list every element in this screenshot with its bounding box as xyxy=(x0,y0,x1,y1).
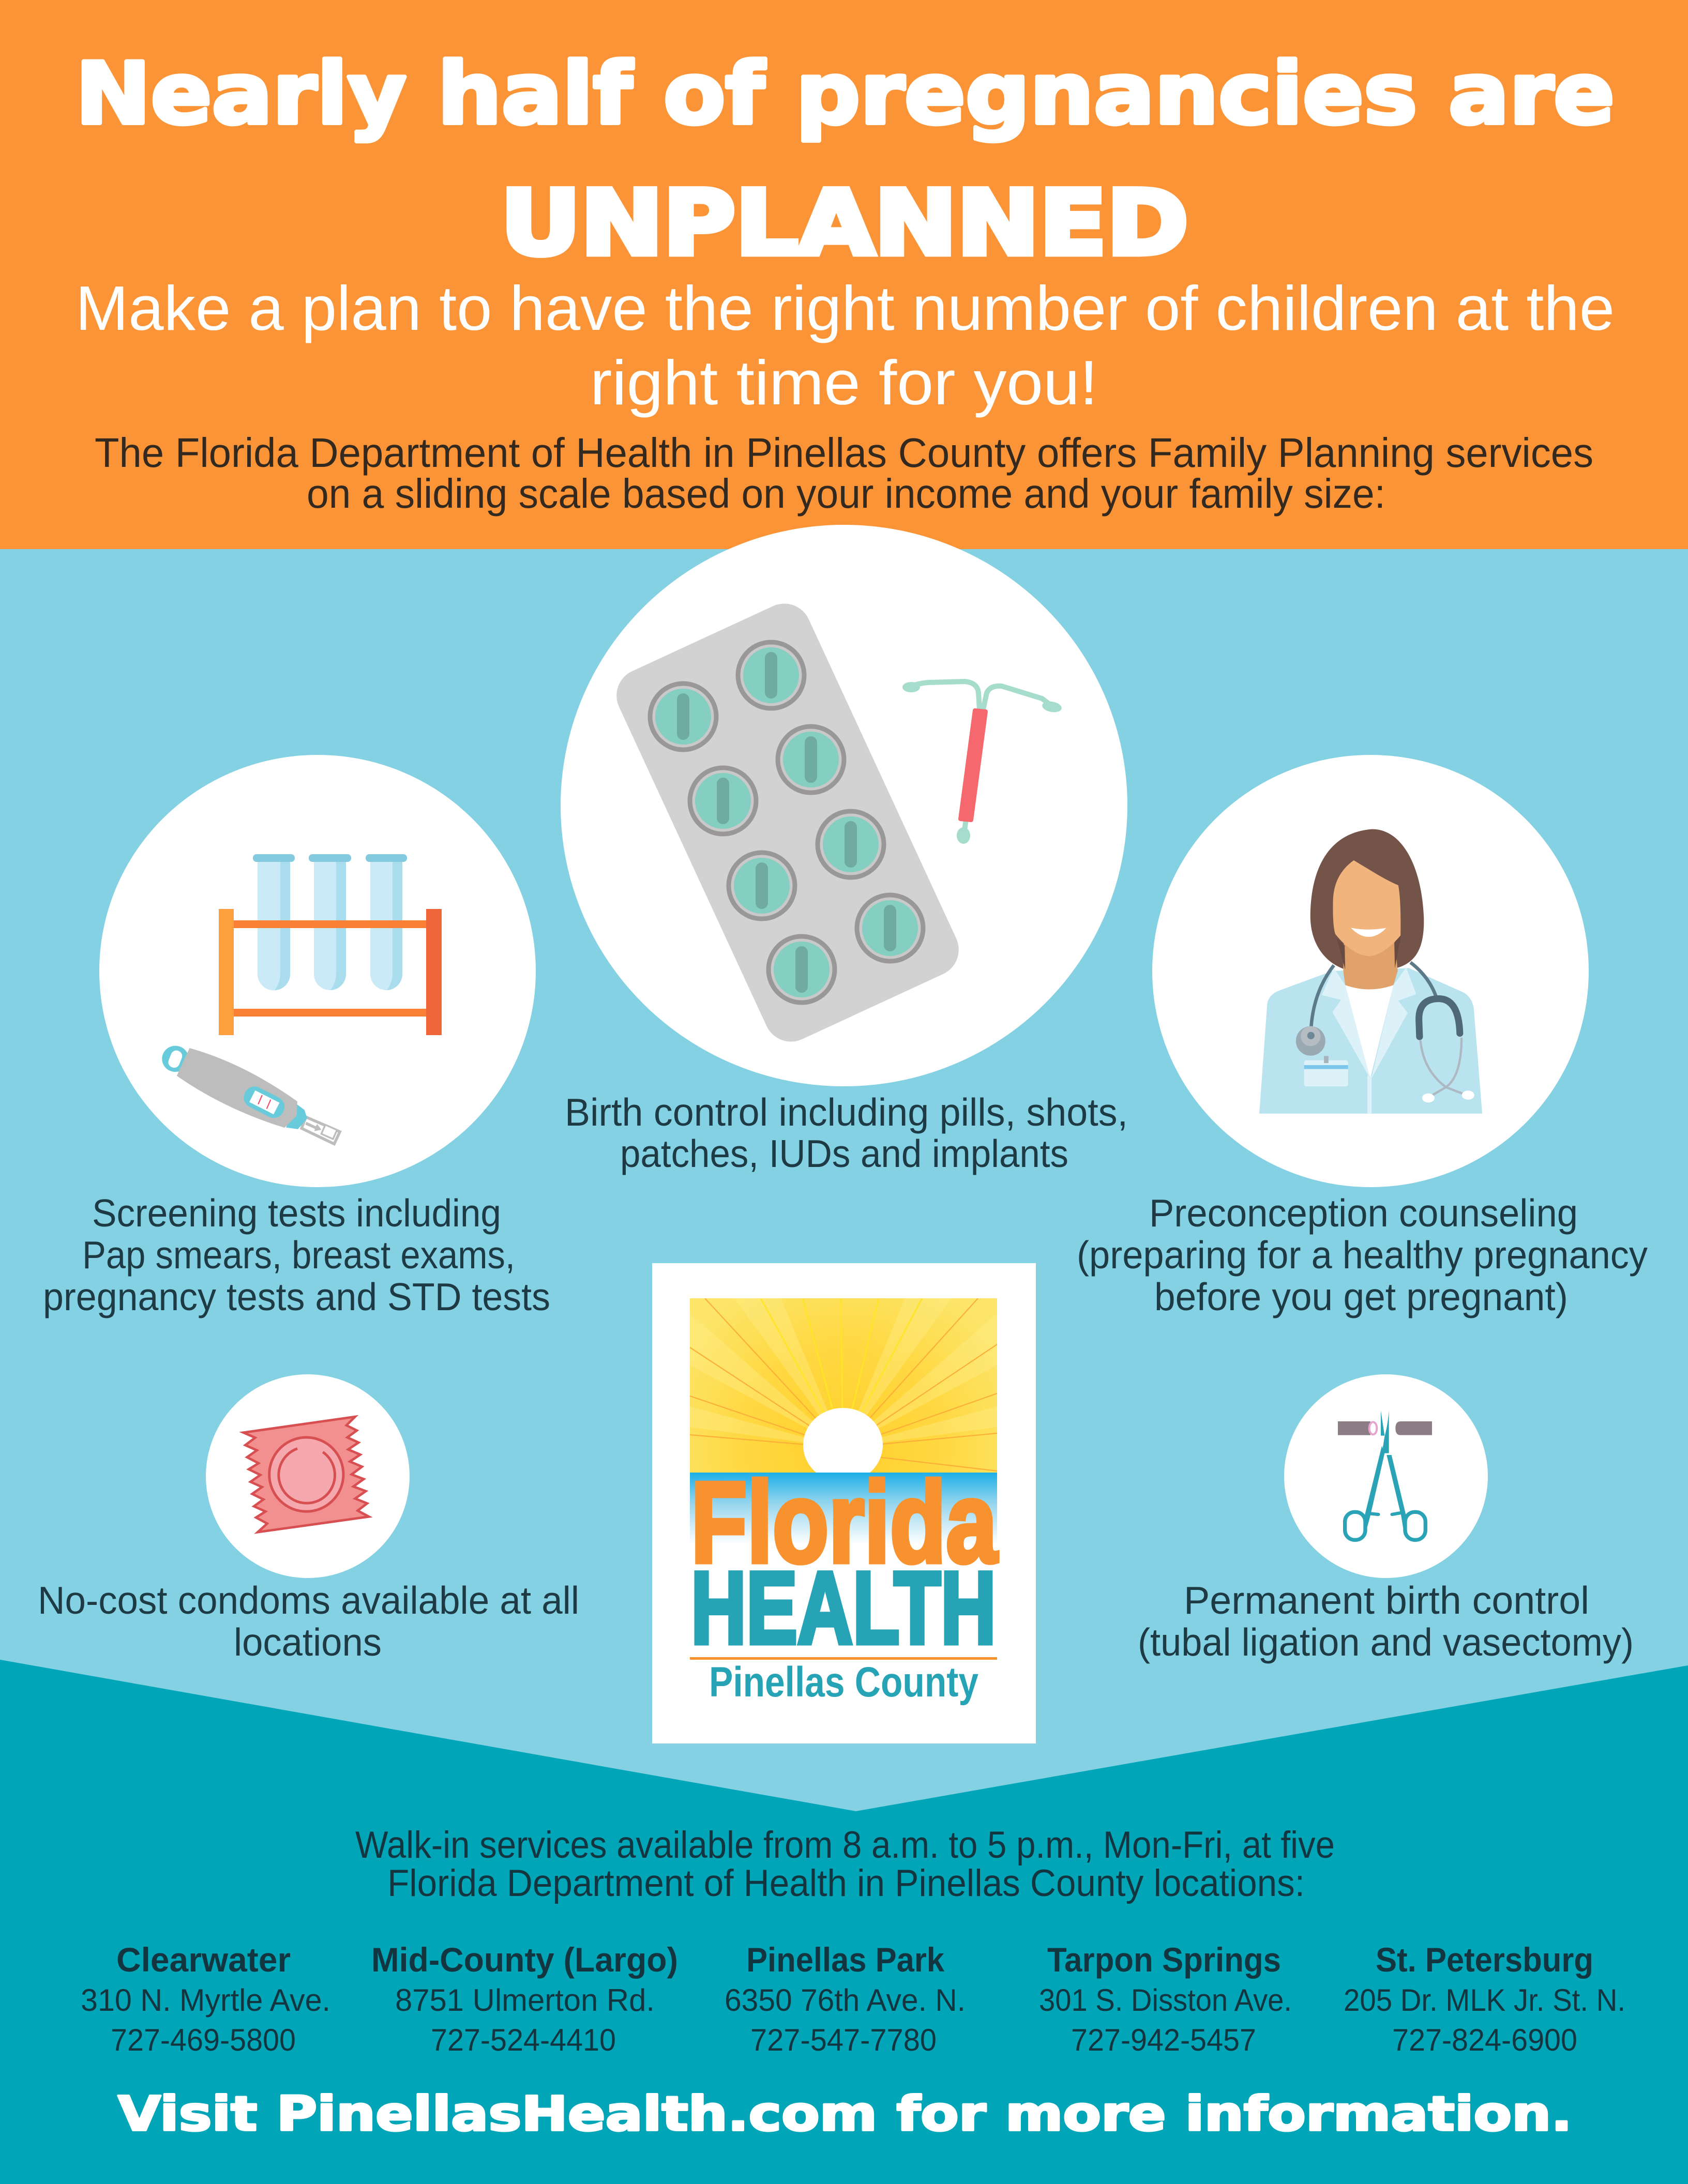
location: Tarpon Springs: 727-942-5457 xyxy=(1071,2023,1256,2057)
location: Mid-County (Largo) xyxy=(371,1940,678,2057)
icon: test tube rack xyxy=(219,854,442,1035)
location: Pinellas Park xyxy=(725,1940,966,2057)
location: St. Petersburg: 727-824-6900 xyxy=(1392,2023,1577,2057)
icon: doctor xyxy=(1152,755,1589,1187)
icon: blister pack xyxy=(608,595,968,1051)
subtitle xyxy=(76,273,1615,418)
logo: Florida Health Pinellas County xyxy=(652,1263,1036,1743)
text: preconception counseling: (preparing for a healthy pregnancy xyxy=(1077,1233,1648,1277)
location: Clearwater: Clearwater xyxy=(116,1940,291,1979)
title xyxy=(76,44,1615,275)
text: walk-in services: Walk-in services available from 8 a.m. to 5 p.m., Mon-Fri, at five xyxy=(355,1824,1335,1866)
location: Clearwater: 727-469-5800 xyxy=(111,2023,296,2057)
text: condoms xyxy=(38,1579,579,1664)
text: birth control xyxy=(565,1090,1128,1175)
intro text: on a sliding scale based on your income and your family size: xyxy=(307,471,1385,517)
doctor coat xyxy=(1259,968,1482,1114)
call to action: Visit PinellasHealth.com for more information. xyxy=(118,2086,1572,2142)
panel: footer band xyxy=(0,1660,1688,2184)
subtitle: right time for you! xyxy=(590,347,1098,418)
text: screening tests xyxy=(43,1191,550,1318)
panel: background services area xyxy=(0,548,1688,2184)
text: screening tests: Screening tests including xyxy=(92,1191,501,1235)
text: birth control: Birth control including pills, shots, xyxy=(565,1090,1128,1134)
doctor shirt xyxy=(1345,985,1393,1079)
text: preconception counseling: Preconception counseling xyxy=(1149,1191,1578,1235)
logo water gradient xyxy=(690,1473,997,1544)
icon: surgical scissors xyxy=(1284,1374,1488,1578)
location: Clearwater: 310 N. Myrtle Ave. xyxy=(81,1983,330,2018)
stethoscope xyxy=(1296,962,1474,1102)
logo sun and rays xyxy=(690,1298,997,1482)
icon: pregnancy test xyxy=(162,1046,340,1144)
location: Mid-County (Largo): 727-524-4410 xyxy=(431,2023,616,2057)
text: screening tests: Pap smears, breast exams, xyxy=(82,1233,515,1277)
location: Mid-County (Largo): Mid-County (Largo) xyxy=(371,1940,678,1979)
location: St. Petersburg xyxy=(1344,1940,1625,2057)
title line 1: Nearly half of pregnancies are xyxy=(76,44,1615,143)
text: preconception counseling: before you get pregnant) xyxy=(1154,1275,1568,1318)
text: permanent birth control xyxy=(1138,1579,1634,1664)
location: Tarpon Springs xyxy=(1039,1940,1292,2057)
text: walk-in services: Florida Department of Health in Pinellas County locations: xyxy=(387,1862,1305,1904)
logo word Florida: Florida xyxy=(691,1459,998,1587)
logo word HEALTH: HEALTH xyxy=(691,1551,996,1665)
text: condoms: locations xyxy=(234,1620,382,1664)
text: birth control: patches, IUDs and implants xyxy=(620,1132,1068,1175)
icon: test tubes and pregnancy test xyxy=(99,755,536,1187)
location: Tarpon Springs: Tarpon Springs xyxy=(1047,1940,1281,1979)
subtitle: Make a plan to have the right number of children at the xyxy=(76,273,1615,343)
text: permanent birth control: Permanent birth control xyxy=(1184,1579,1589,1622)
intro text: The Florida Department of Health in Pinellas County offers Family Planning services xyxy=(95,430,1593,476)
icon: condom xyxy=(206,1374,410,1578)
logo word Pinellas County: Pinellas County xyxy=(709,1659,978,1706)
text: screening tests: pregnancy tests and STD tests xyxy=(43,1275,550,1318)
location: Pinellas Park: Pinellas Park xyxy=(746,1940,944,1979)
text: preconception counseling xyxy=(1077,1191,1648,1318)
doctor hair xyxy=(1310,829,1424,969)
location: Clearwater xyxy=(81,1940,330,2057)
intro text xyxy=(95,430,1593,517)
location: Pinellas Park: 727-547-7780 xyxy=(750,2023,937,2057)
location: Pinellas Park: 6350 76th Ave. N. xyxy=(725,1983,966,2018)
location: Mid-County (Largo): 8751 Ulmerton Rd. xyxy=(395,1983,655,2018)
text: condoms: No-cost condoms available at all xyxy=(38,1579,579,1622)
location: Tarpon Springs: 301 S. Disston Ave. xyxy=(1039,1983,1292,2018)
icon: birth control pills and IUD xyxy=(561,525,1127,1086)
text: permanent birth control: (tubal ligation and vasectomy) xyxy=(1138,1620,1634,1664)
name badge xyxy=(1304,1056,1348,1086)
location: St. Petersburg: 205 Dr. MLK Jr. St. N. xyxy=(1344,1983,1625,2018)
text: walk-in services xyxy=(355,1824,1335,1904)
location: St. Petersburg: St. Petersburg xyxy=(1376,1940,1593,1979)
icon: IUD xyxy=(902,681,1062,844)
title line 2: UNPLANNED xyxy=(501,171,1188,275)
panel: header band xyxy=(0,0,1688,549)
